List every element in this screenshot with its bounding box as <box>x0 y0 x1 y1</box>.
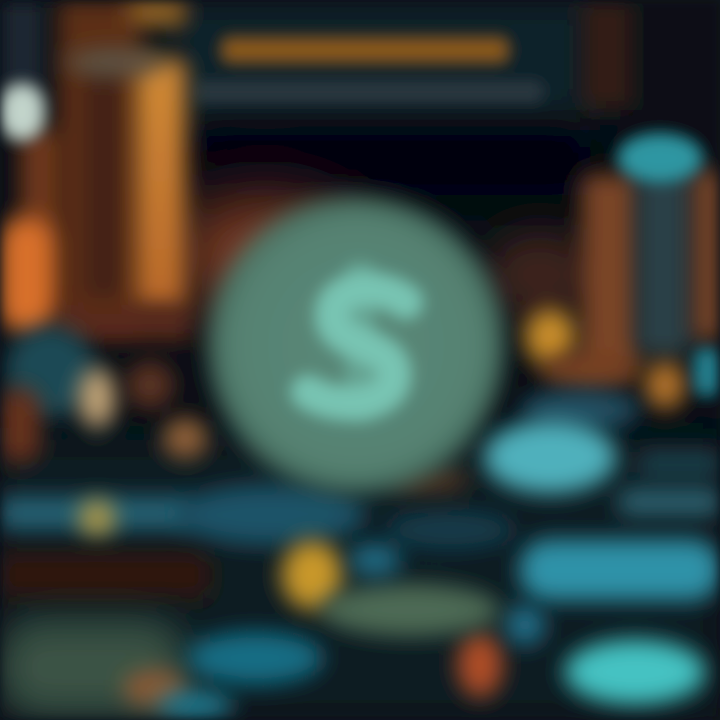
panel: left copper pillar <box>0 0 190 340</box>
heading placeholder: blurred title <box>197 38 543 102</box>
panel: left coin pile <box>0 326 210 715</box>
panel: right coin pile <box>385 390 720 704</box>
coin <box>208 197 504 493</box>
panel: bottom centre coins <box>157 466 500 719</box>
dollar sign <box>308 262 406 422</box>
panel: right copper pillar <box>525 0 720 409</box>
